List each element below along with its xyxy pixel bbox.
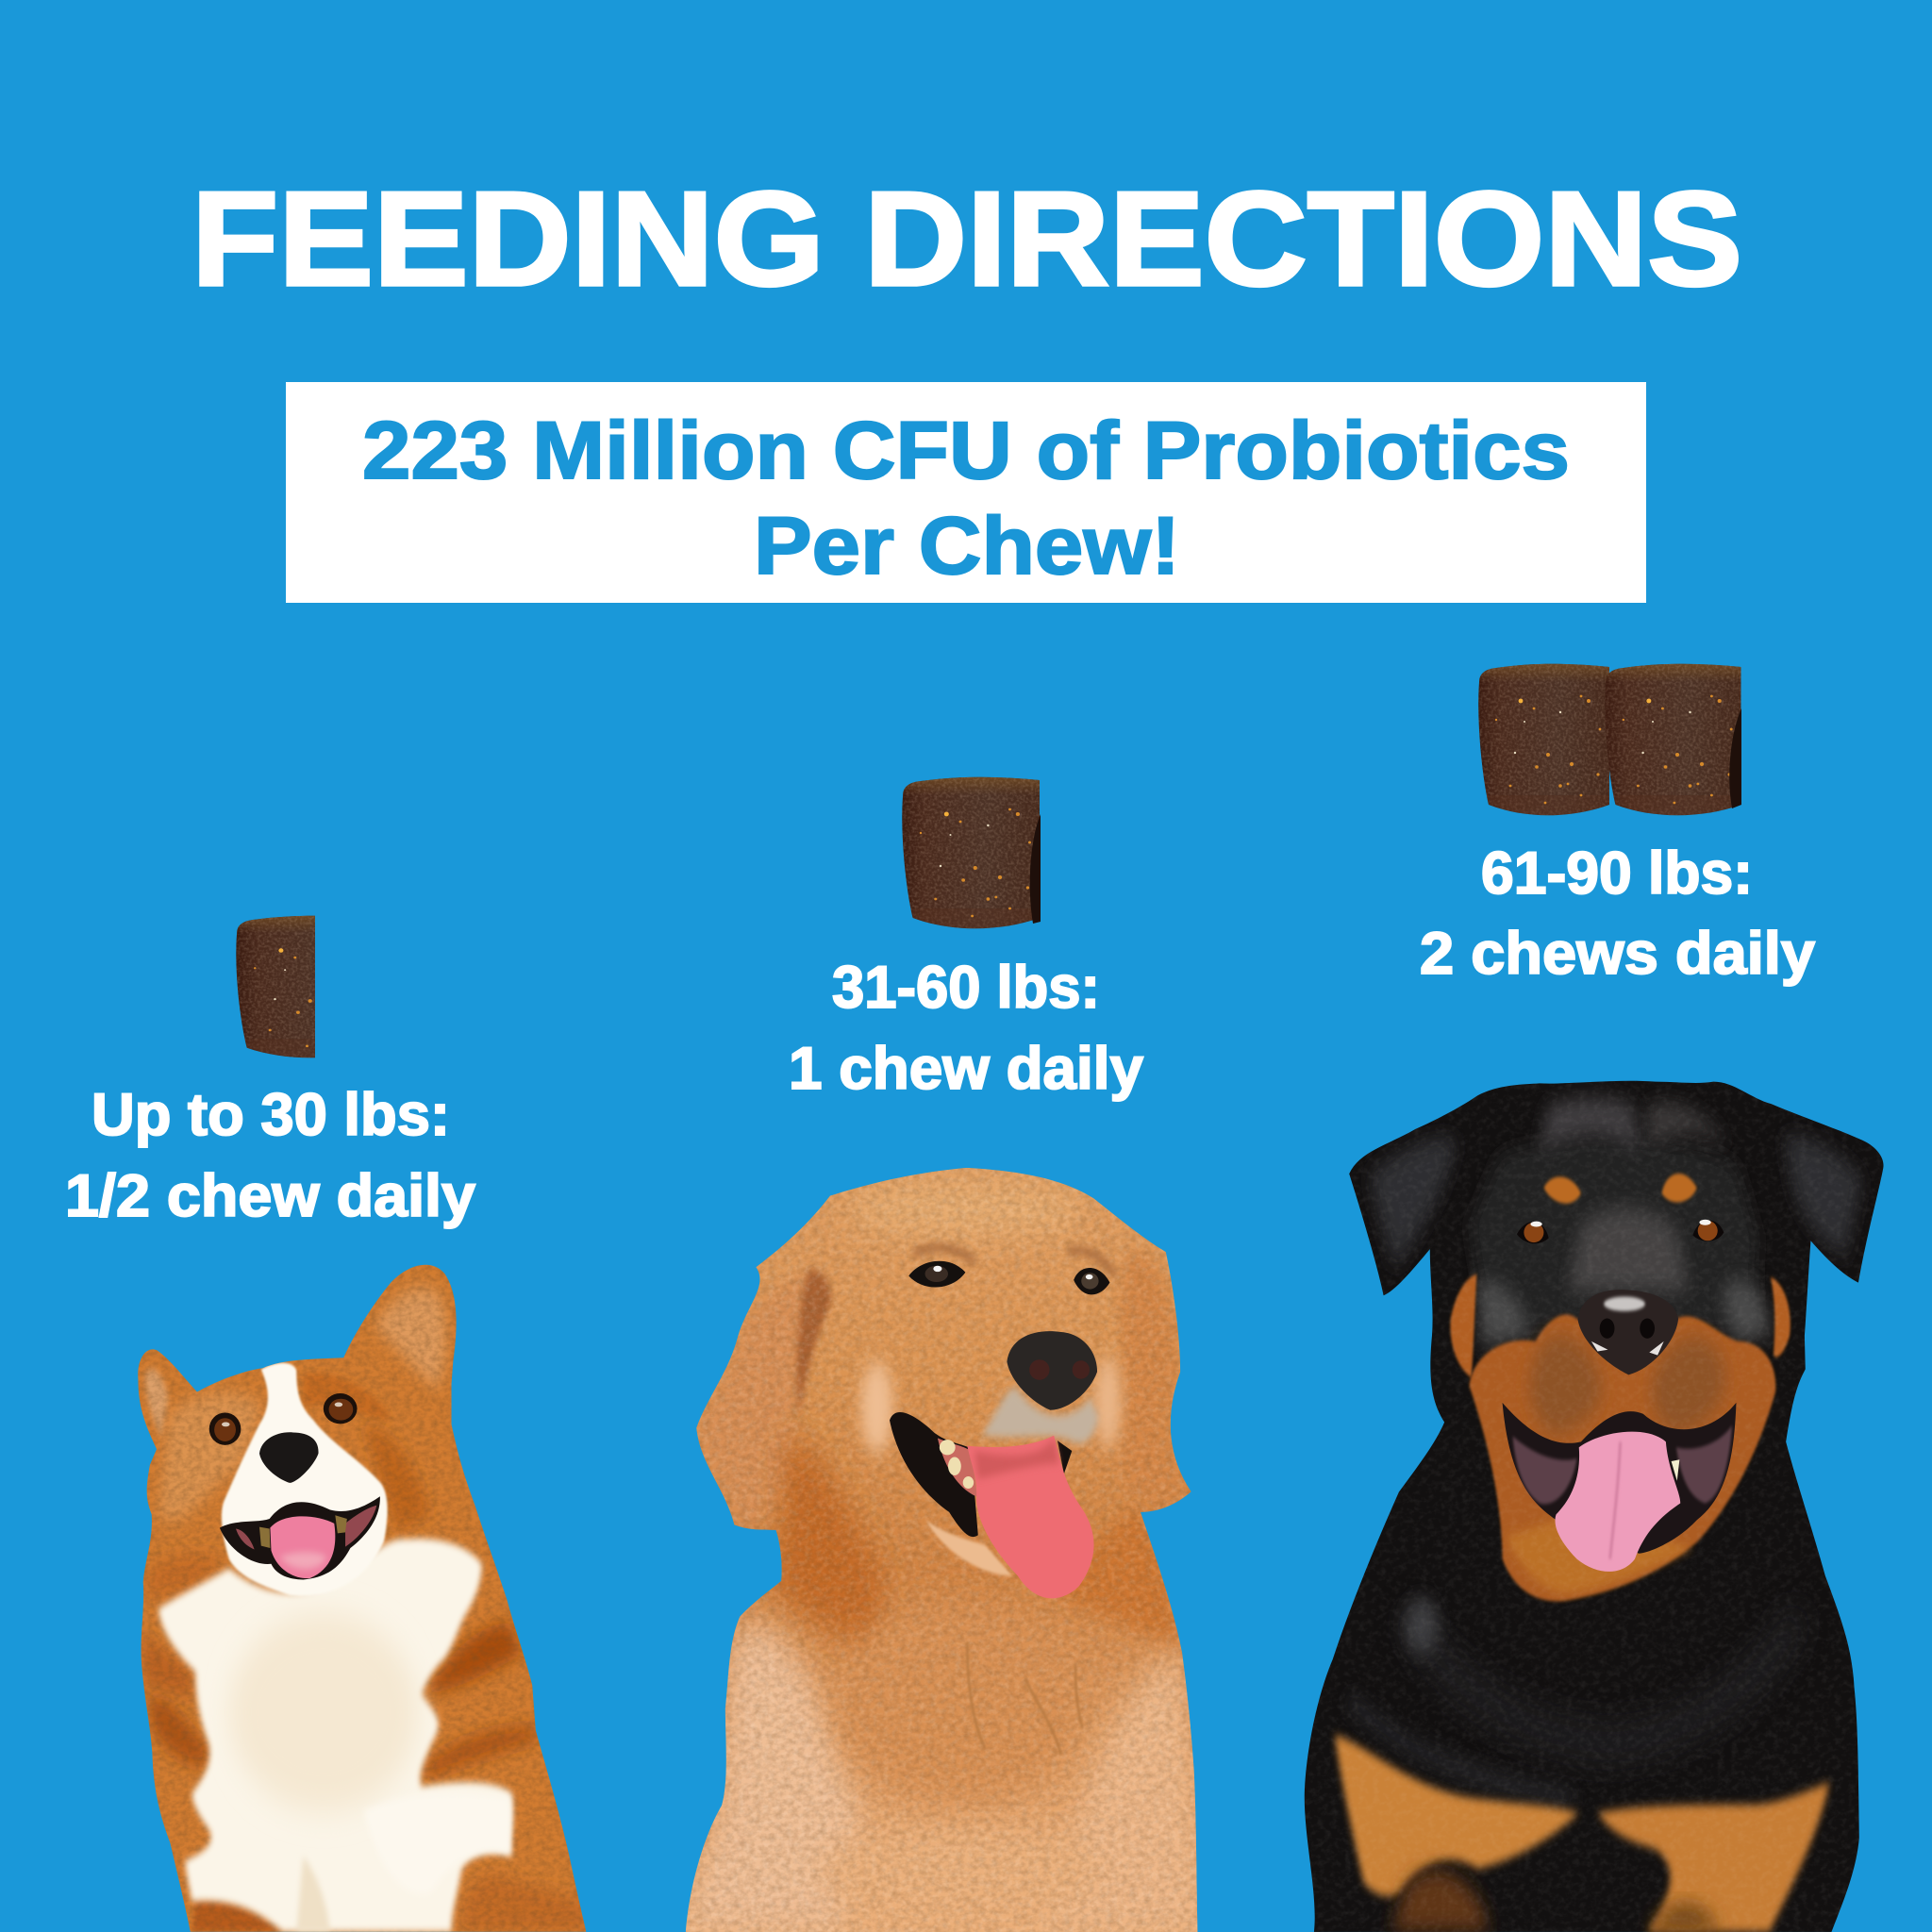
chest cream [229, 1613, 418, 1811]
tongue [967, 1436, 1094, 1598]
icon: one chew [899, 774, 1043, 937]
muzzle grey [982, 1387, 1099, 1443]
label: large dog dose: 2 chews daily [1420, 921, 1815, 987]
mouth [220, 1496, 380, 1579]
chest tan left [1335, 1735, 1579, 1896]
ear right [1119, 1252, 1191, 1507]
eyebrow shadow [913, 1247, 1115, 1274]
cheek tan [1450, 1274, 1476, 1377]
tongue [1555, 1432, 1680, 1572]
label: large dog dose [1420, 841, 1815, 987]
title: FEEDING DIRECTIONS [192, 164, 1742, 314]
ears sheen [1370, 1138, 1457, 1269]
label: medium dog dose: 1 chew daily [789, 1036, 1143, 1102]
callout line 1: 223 Million CFU of Probiotics [362, 406, 1570, 496]
ear shading [374, 1288, 446, 1389]
cheek light [860, 1361, 893, 1454]
central ruff [838, 1611, 1083, 1806]
mouth [890, 1412, 978, 1537]
face light patches [158, 1392, 263, 1521]
eyes [908, 1261, 965, 1288]
panel: probiotics callout [286, 382, 1646, 603]
chin [925, 1520, 1012, 1575]
eyes [1517, 1222, 1549, 1243]
fur texture [1283, 1057, 1932, 1932]
nose [1007, 1331, 1097, 1410]
callout line 2: Per Chew! [754, 501, 1180, 591]
fur texture [686, 1168, 1197, 1932]
eyebrows tan [1543, 1176, 1581, 1204]
body sheen [1407, 1615, 1800, 1743]
fur stripes [425, 1623, 523, 1694]
illustration: golden retriever [685, 1168, 1198, 1932]
neck orange [773, 1440, 884, 1647]
chest tan right [1597, 1782, 1829, 1932]
ear left [696, 1286, 800, 1530]
label: small dog dose [65, 1082, 475, 1229]
tooth [1672, 1459, 1679, 1481]
label: large dog dose: 61-90 lbs: [1481, 841, 1753, 907]
muzzle and blaze [222, 1363, 388, 1596]
mouth [1503, 1403, 1736, 1554]
muzzle tan [1469, 1315, 1775, 1601]
illustration: corgi [138, 1264, 587, 1932]
chest sides [682, 1624, 862, 1932]
forehead light [848, 1183, 1087, 1234]
tongue [270, 1516, 335, 1578]
nose [259, 1432, 319, 1483]
icon: half chew [233, 913, 379, 1066]
eyes [209, 1412, 241, 1445]
label: medium dog dose [789, 955, 1143, 1102]
label: small dog dose: Up to 30 lbs: [92, 1082, 450, 1148]
head sheen [1469, 1138, 1759, 1336]
label: medium dog dose: 31-60 lbs: [832, 955, 1100, 1021]
icon: two chews [1475, 661, 1745, 824]
white chest [158, 1539, 513, 1932]
illustration: rottweiler [1304, 1081, 1883, 1932]
fur texture [138, 1265, 586, 1932]
label: small dog dose: 1/2 chew daily [65, 1163, 475, 1229]
nose [1577, 1290, 1678, 1374]
